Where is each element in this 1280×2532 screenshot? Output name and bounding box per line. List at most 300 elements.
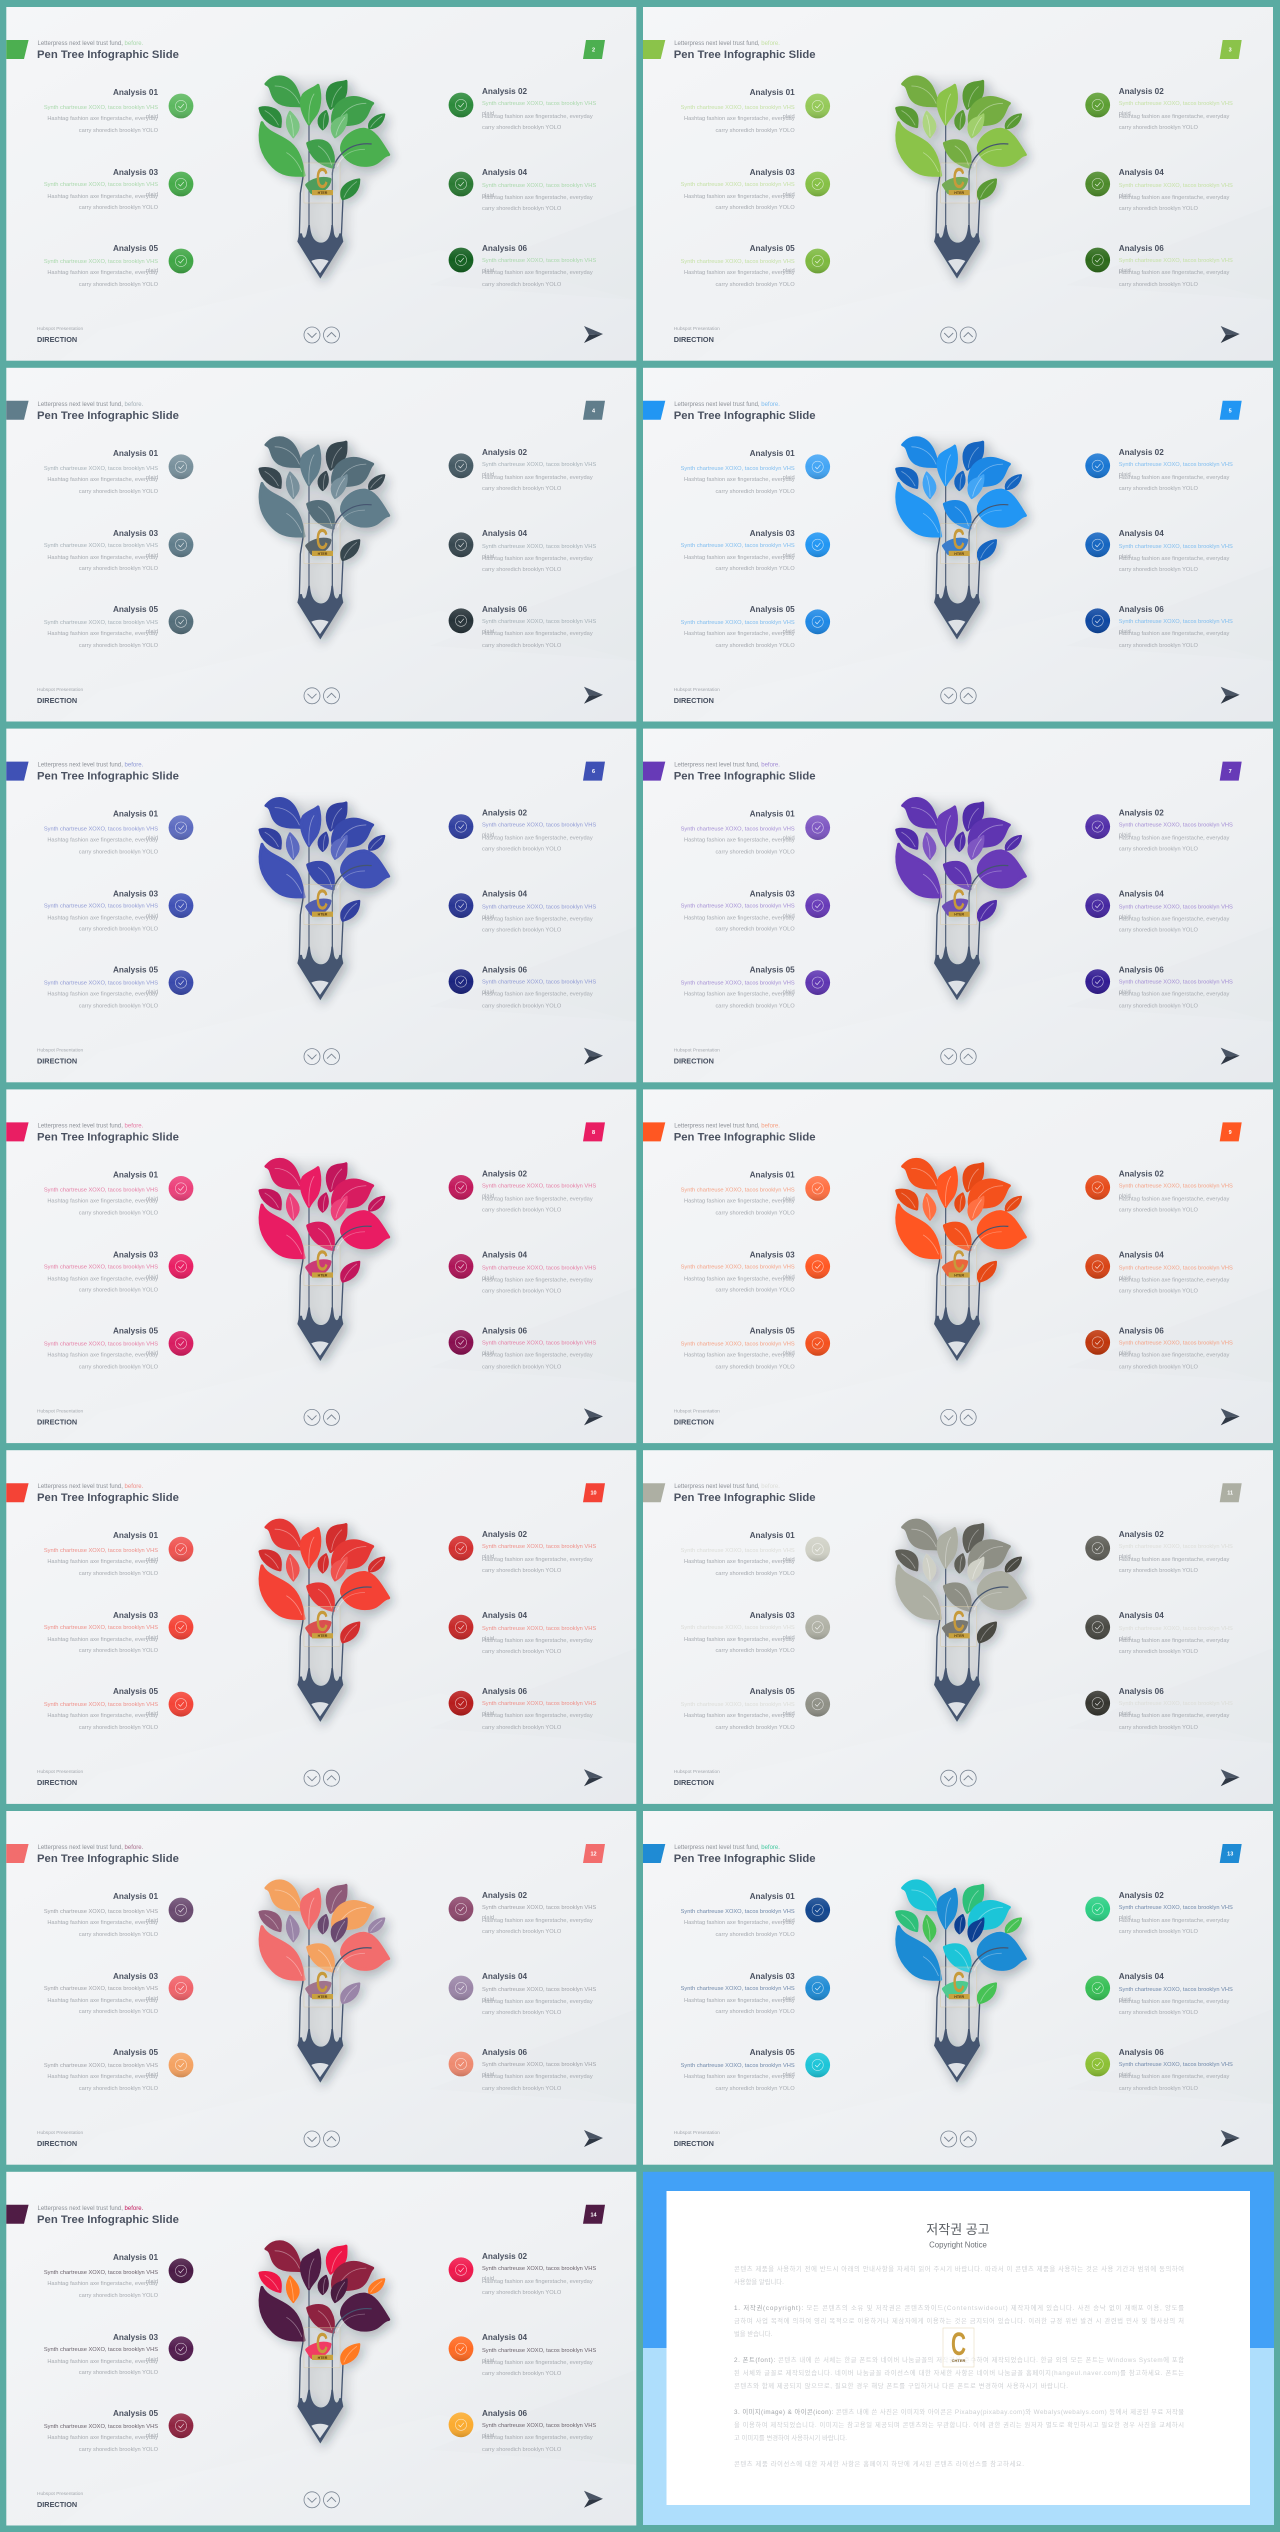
analysis 06: Analysis 06 <box>482 605 528 614</box>
analysis 04 <box>1085 1250 1233 1294</box>
analysis 04: Synth chartreuse XOXO, tacos brooklyn VHS <box>1119 1987 1233 1993</box>
header tab <box>6 762 29 781</box>
page number tag: 4 <box>592 408 596 414</box>
logo watermark: HTER <box>318 552 328 556</box>
analysis 05: Synth chartreuse XOXO, tacos brooklyn VHS <box>681 1341 795 1347</box>
analysis 01 <box>44 1170 193 1216</box>
analysis 06: carry shoredich brooklyn YOLO <box>1119 282 1199 288</box>
analysis 05: Synth chartreuse XOXO, tacos brooklyn VHS <box>681 259 795 265</box>
analysis 05: plaid <box>783 1711 795 1717</box>
analysis 05: Synth chartreuse XOXO, tacos brooklyn VHS <box>44 981 158 987</box>
icon: navigation chevrons <box>304 1770 340 1786</box>
icon: navigation chevrons <box>941 327 976 343</box>
analysis 04: carry shoredich brooklyn YOLO <box>1119 1288 1199 1294</box>
page number tag <box>1220 1844 1242 1863</box>
analysis 02: Analysis 02 <box>482 2252 528 2261</box>
analysis 05: Analysis 05 <box>750 244 795 253</box>
analysis 06: carry shoredich brooklyn YOLO <box>482 2086 562 2092</box>
analysis 02: Analysis 02 <box>1119 809 1164 818</box>
pen tree illustration <box>897 438 1027 647</box>
footer text: DIRECTION <box>37 2500 77 2509</box>
page number tag <box>583 1483 605 1502</box>
analysis 04: plaid <box>1119 554 1131 560</box>
footer text: Hubspot Presentation <box>37 2491 83 2497</box>
analysis 04: plaid <box>482 1997 494 2003</box>
analysis 04: Synth chartreuse XOXO, tacos brooklyn VHS <box>482 2348 596 2354</box>
analysis 03: Analysis 03 <box>750 1611 795 1620</box>
analysis 04: plaid <box>1119 1275 1131 1281</box>
analysis 03: Analysis 03 <box>750 890 795 899</box>
subtitle: Letterpress next level trust fund, before. <box>674 402 780 408</box>
analysis 04: Synth chartreuse XOXO, tacos brooklyn VHS <box>482 183 596 189</box>
logo watermark <box>941 1245 977 1285</box>
pen tree illustration <box>260 1520 390 1730</box>
footer text <box>37 687 83 705</box>
analysis 04: carry shoredich brooklyn YOLO <box>482 206 562 212</box>
analysis 06: Synth chartreuse XOXO, tacos brooklyn VHS <box>482 1701 596 1707</box>
analysis 05 <box>681 1326 830 1370</box>
analysis 05: Hashtag fashion axe fingerstache, everyday <box>47 2074 158 2080</box>
analysis 03 <box>44 1972 193 2015</box>
analysis 03: Analysis 03 <box>113 2333 158 2342</box>
analysis 02: Hashtag fashion axe fingerstache, everyday <box>1119 1557 1230 1563</box>
notice intro <box>734 2264 1184 2286</box>
analysis 06: Synth chartreuse XOXO, tacos brooklyn VHS <box>1119 1701 1233 1707</box>
pen tree illustration <box>260 1881 390 2091</box>
analysis 03: Hashtag fashion axe fingerstache, everyday <box>684 1276 795 1282</box>
logo watermark: C <box>951 2326 966 2362</box>
analysis 04 <box>449 168 596 212</box>
header tab <box>6 1122 29 1141</box>
analysis 05: carry shoredich brooklyn YOLO <box>79 2086 159 2092</box>
analysis 05: Analysis 05 <box>113 966 158 975</box>
analysis 02: Analysis 02 <box>1119 1891 1164 1900</box>
analysis 06: Hashtag fashion axe fingerstache, everyday <box>1119 992 1230 998</box>
analysis 06: Analysis 06 <box>482 966 528 975</box>
analysis 03: Analysis 03 <box>750 1972 795 1981</box>
page number tag <box>1220 762 1242 781</box>
analysis 03: plaid <box>783 1996 795 2002</box>
analysis 03: Hashtag fashion axe fingerstache, everyday <box>684 555 795 561</box>
page number tag <box>1220 401 1242 420</box>
analysis 04: Analysis 04 <box>482 1611 528 1620</box>
pen tree illustration <box>897 799 1027 1008</box>
analysis 01: carry shoredich brooklyn YOLO <box>715 1210 795 1216</box>
analysis 05: Hashtag fashion axe fingerstache, everyday <box>47 1713 158 1719</box>
notice intro: 사용함을 알립니다. <box>734 2277 784 2286</box>
slide 6: indigo pen tree <box>6 729 636 1082</box>
analysis 02: Analysis 02 <box>482 1530 528 1539</box>
title: Pen Tree Infographic Slide <box>37 1131 179 1143</box>
analysis 03: Hashtag fashion axe fingerstache, everyday <box>47 1998 158 2004</box>
analysis 04: Analysis 04 <box>1119 529 1164 538</box>
analysis 05: Analysis 05 <box>113 2048 158 2057</box>
notice section 1: copyright: 벌을 받습니다. <box>734 2329 773 2338</box>
slide 9: orange pen tree <box>643 1089 1273 1443</box>
analysis 06: Hashtag fashion axe fingerstache, everyday <box>482 2435 593 2441</box>
page number tag: 11 <box>1227 1491 1233 1497</box>
analysis 03: plaid <box>783 192 795 198</box>
notice section 3: images and icons: 고 이미지를 변경하여 사용하시기 바랍니다. <box>734 2433 847 2442</box>
analysis 04: carry shoredich brooklyn YOLO <box>1119 1649 1199 1655</box>
analysis 04: Analysis 04 <box>482 1972 528 1981</box>
footer text <box>674 1408 720 1426</box>
footer text <box>674 1048 720 1066</box>
analysis 01: Synth chartreuse XOXO, tacos brooklyn VHS <box>681 827 795 833</box>
pen tree illustration <box>897 1159 1027 1369</box>
icon: navigation chevrons <box>941 1409 976 1425</box>
analysis 02 <box>1085 1169 1233 1213</box>
analysis 05: plaid <box>146 2433 158 2439</box>
footer text: DIRECTION <box>37 335 77 344</box>
analysis 02: carry shoredich brooklyn YOLO <box>1119 1568 1199 1574</box>
header tab <box>643 40 665 59</box>
logo watermark <box>943 2326 974 2367</box>
analysis 02: Analysis 02 <box>482 1891 528 1900</box>
subtitle: Letterpress next level trust fund, before. <box>674 41 780 47</box>
analysis 04: carry shoredich brooklyn YOLO <box>482 928 562 934</box>
analysis 03: Synth chartreuse XOXO, tacos brooklyn VHS <box>681 904 795 910</box>
notice section 1: copyright: 금하며 사업 목적에 의하여 영리 목적으로 이용하거나 제삼자에게 이용하는 것은 금지되어 있습니다. 이러한 규정 위반 발견 시 관련법 민사 및 형사상의 처 <box>734 2316 1184 2325</box>
analysis 03: Hashtag fashion axe fingerstache, everyday <box>684 1637 795 1643</box>
analysis 05: Hashtag fashion axe fingerstache, everyday <box>47 992 158 998</box>
analysis 04 <box>1085 1972 1233 2016</box>
analysis 01: carry shoredich brooklyn YOLO <box>79 1210 159 1216</box>
analysis 01: plaid <box>146 1196 158 1202</box>
analysis 01: Synth chartreuse XOXO, tacos brooklyn VHS <box>681 1548 795 1554</box>
footer text: DIRECTION <box>37 1417 77 1426</box>
analysis 06: plaid <box>482 1711 494 1717</box>
analysis 03: carry shoredich brooklyn YOLO <box>79 205 159 211</box>
logo watermark: HTER <box>954 913 964 917</box>
analysis 02: Synth chartreuse XOXO, tacos brooklyn VHS <box>482 1905 596 1911</box>
analysis 04: Synth chartreuse XOXO, tacos brooklyn VHS <box>482 1265 596 1271</box>
analysis 03: Hashtag fashion axe fingerstache, everyday <box>47 916 158 922</box>
analysis 06: plaid <box>1119 629 1131 635</box>
analysis 05: plaid <box>146 1350 158 1356</box>
analysis 03: carry shoredich brooklyn YOLO <box>715 1287 795 1293</box>
analysis 01: Analysis 01 <box>113 1531 158 1540</box>
analysis 05: Synth chartreuse XOXO, tacos brooklyn VHS <box>44 2424 158 2430</box>
notice section 2: fonts: 콘텐츠와 함께 제공되지 않으므로, 필요한 경우 해당 폰트를 구입하거나 다른 폰트로 변경하여 사용하시기 바랍니다. <box>734 2381 1068 2390</box>
analysis 03 <box>44 1611 193 1654</box>
analysis 02 <box>449 809 596 853</box>
analysis 05: Hashtag fashion axe fingerstache, everyday <box>684 992 795 998</box>
header tab <box>6 1483 29 1502</box>
logo watermark <box>941 163 977 203</box>
analysis 03: Synth chartreuse XOXO, tacos brooklyn VHS <box>44 1625 158 1631</box>
analysis 03: plaid <box>783 553 795 559</box>
logo watermark <box>304 2328 340 2368</box>
analysis 03: Analysis 03 <box>750 529 795 538</box>
analysis 01: plaid <box>783 1918 795 1924</box>
pen tree illustration <box>260 77 390 287</box>
analysis 02: Hashtag fashion axe fingerstache, everyday <box>482 1918 593 1924</box>
analysis 06: Analysis 06 <box>482 244 528 253</box>
analysis 02: Synth chartreuse XOXO, tacos brooklyn VHS <box>482 462 596 468</box>
analysis 04: Hashtag fashion axe fingerstache, everyday <box>1119 1999 1230 2005</box>
analysis 01: Synth chartreuse XOXO, tacos brooklyn VHS <box>44 1187 158 1193</box>
subtitle: Letterpress next level trust fund, before. <box>38 2206 144 2212</box>
analysis 01: Analysis 01 <box>113 88 158 97</box>
subtitle: Letterpress next level trust fund, before. <box>38 402 144 408</box>
icon: navigation chevrons <box>304 327 340 343</box>
analysis 02 <box>449 1169 596 1213</box>
analysis 05: Hashtag fashion axe fingerstache, everyday <box>47 631 158 637</box>
analysis 02: carry shoredich brooklyn YOLO <box>482 2290 562 2296</box>
analysis 05: carry shoredich brooklyn YOLO <box>715 643 795 649</box>
page number tag: 9 <box>1229 1130 1232 1136</box>
analysis 04: carry shoredich brooklyn YOLO <box>482 567 562 573</box>
analysis 06: Synth chartreuse XOXO, tacos brooklyn VHS <box>482 980 596 986</box>
analysis 01: Hashtag fashion axe fingerstache, everyday <box>47 1198 158 1204</box>
analysis 06 <box>449 244 596 288</box>
analysis 02: plaid <box>1119 1193 1131 1199</box>
page number tag <box>1220 1483 1242 1502</box>
analysis 04: Synth chartreuse XOXO, tacos brooklyn VHS <box>482 1626 596 1632</box>
icon: paper plane <box>1221 687 1240 704</box>
analysis 02: plaid <box>482 1554 494 1560</box>
title: Pen Tree Infographic Slide <box>37 2214 179 2226</box>
analysis 06: Hashtag fashion axe fingerstache, everyday <box>482 992 593 998</box>
page number tag <box>583 2205 605 2224</box>
analysis 03 <box>44 1250 193 1293</box>
analysis 01: carry shoredich brooklyn YOLO <box>715 850 795 856</box>
analysis 01: carry shoredich brooklyn YOLO <box>79 489 159 495</box>
slide 11: grey pen tree <box>643 1450 1273 1804</box>
title: Pen Tree Infographic Slide <box>674 1131 816 1143</box>
pen tree illustration <box>897 1881 1027 2091</box>
analysis 06: carry shoredich brooklyn YOLO <box>1119 2086 1199 2092</box>
page number tag: 2 <box>592 48 595 54</box>
analysis 03: Synth chartreuse XOXO, tacos brooklyn VHS <box>681 1625 795 1631</box>
footer text: DIRECTION <box>37 1057 77 1066</box>
analysis 04: carry shoredich brooklyn YOLO <box>1119 206 1199 212</box>
analysis 01 <box>681 88 830 134</box>
analysis 05: Analysis 05 <box>750 605 795 614</box>
page number tag <box>1220 1122 1242 1141</box>
analysis 05: Analysis 05 <box>113 605 158 614</box>
analysis 05: Analysis 05 <box>750 2048 795 2057</box>
title: Pen Tree Infographic Slide <box>674 1492 816 1504</box>
analysis 04: Analysis 04 <box>1119 1972 1164 1981</box>
analysis 01: Synth chartreuse XOXO, tacos brooklyn VHS <box>44 1548 158 1554</box>
analysis 03: Analysis 03 <box>750 1250 795 1259</box>
analysis 03: plaid <box>146 1635 158 1641</box>
analysis 06: carry shoredich brooklyn YOLO <box>1119 1725 1199 1731</box>
analysis 06: plaid <box>1119 990 1131 996</box>
analysis 01 <box>44 449 193 495</box>
analysis 03: plaid <box>783 1274 795 1280</box>
analysis 04 <box>449 2333 596 2377</box>
analysis 02: plaid <box>1119 1554 1131 1560</box>
analysis 02: Hashtag fashion axe fingerstache, everyday <box>482 1557 593 1563</box>
analysis 05: plaid <box>146 1711 158 1717</box>
analysis 01: Analysis 01 <box>750 1531 795 1540</box>
subtitle: Letterpress next level trust fund, before. <box>674 763 780 769</box>
analysis 02: plaid <box>482 111 494 117</box>
logo watermark: HTER <box>954 552 964 556</box>
analysis 04 <box>449 1250 596 1294</box>
analysis 06: Analysis 06 <box>1119 966 1164 975</box>
analysis 03 <box>681 529 830 572</box>
analysis 01: Analysis 01 <box>113 1892 158 1901</box>
footer text <box>674 2130 720 2148</box>
analysis 01: Analysis 01 <box>113 1170 158 1179</box>
pen tree illustration <box>260 799 390 1008</box>
analysis 03: carry shoredich brooklyn YOLO <box>715 205 795 211</box>
subtitle: Letterpress next level trust fund, before. <box>38 41 144 47</box>
logo watermark <box>304 1967 340 2007</box>
analysis 05 <box>681 2048 830 2092</box>
analysis 01: Synth chartreuse XOXO, tacos brooklyn VHS <box>681 105 795 111</box>
analysis 05: Analysis 05 <box>750 1326 795 1335</box>
analysis 04: Hashtag fashion axe fingerstache, everyday <box>482 1999 593 2005</box>
analysis 02: carry shoredich brooklyn YOLO <box>1119 1207 1199 1213</box>
analysis 02: Hashtag fashion axe fingerstache, everyday <box>1119 1196 1230 1202</box>
analysis 05: plaid <box>146 629 158 635</box>
analysis 02: Synth chartreuse XOXO, tacos brooklyn VHS <box>1119 823 1233 829</box>
analysis 03: Analysis 03 <box>113 529 158 538</box>
analysis 01: plaid <box>783 836 795 842</box>
title: Pen Tree Infographic Slide <box>37 1853 179 1865</box>
title: Pen Tree Infographic Slide <box>37 410 179 422</box>
analysis 05: carry shoredich brooklyn YOLO <box>79 2447 159 2453</box>
analysis 06: carry shoredich brooklyn YOLO <box>482 643 562 649</box>
analysis 02: Hashtag fashion axe fingerstache, everyday <box>482 114 593 120</box>
analysis 03: carry shoredich brooklyn YOLO <box>715 927 795 933</box>
analysis 02: carry shoredich brooklyn YOLO <box>1119 847 1199 853</box>
analysis 03 <box>44 529 193 572</box>
analysis 02: carry shoredich brooklyn YOLO <box>482 125 562 131</box>
analysis 06 <box>449 2048 596 2092</box>
analysis 01: Hashtag fashion axe fingerstache, everyday <box>684 1920 795 1926</box>
analysis 06: Hashtag fashion axe fingerstache, everyday <box>482 270 593 276</box>
analysis 06: Analysis 06 <box>1119 244 1164 253</box>
analysis 04: plaid <box>1119 193 1131 199</box>
analysis 03: Synth chartreuse XOXO, tacos brooklyn VHS <box>681 543 795 549</box>
footer text <box>37 326 83 344</box>
page number tag: 7 <box>1229 769 1232 775</box>
analysis 05: Synth chartreuse XOXO, tacos brooklyn VHS <box>44 259 158 265</box>
footer text: Hubspot Presentation <box>37 1048 83 1054</box>
icon: navigation chevrons <box>941 1770 976 1786</box>
analysis 06: Synth chartreuse XOXO, tacos brooklyn VHS <box>482 258 596 264</box>
slide 13: blue and teal pen tree <box>643 1811 1273 2165</box>
analysis 01: Analysis 01 <box>113 449 158 458</box>
icon: navigation chevrons <box>304 2492 340 2508</box>
slide 10: red pen tree <box>6 1450 636 1804</box>
pen tree illustration <box>897 1520 1027 1730</box>
page number tag: 6 <box>592 769 595 775</box>
analysis 03: plaid <box>783 914 795 920</box>
header tab <box>6 401 29 420</box>
analysis 04: Hashtag fashion axe fingerstache, everyday <box>1119 195 1230 201</box>
notice section 3: images and icons <box>734 2407 1184 2442</box>
analysis 04: Hashtag fashion axe fingerstache, everyday <box>1119 1638 1230 1644</box>
analysis 01: Analysis 01 <box>113 2253 158 2262</box>
analysis 05 <box>44 1687 193 1731</box>
page number tag: 8 <box>592 1130 595 1136</box>
analysis 01: plaid <box>146 475 158 481</box>
slide 8: pink pen tree <box>6 1089 636 1443</box>
analysis 04: Analysis 04 <box>482 529 528 538</box>
analysis 01: Hashtag fashion axe fingerstache, everyday <box>47 1559 158 1565</box>
analysis 03 <box>681 1972 830 2015</box>
analysis 01 <box>681 449 830 495</box>
analysis 06: Hashtag fashion axe fingerstache, everyday <box>1119 631 1230 637</box>
header tab <box>6 40 29 59</box>
logo watermark <box>941 885 977 925</box>
title: Pen Tree Infographic Slide <box>674 771 816 783</box>
analysis 04: Synth chartreuse XOXO, tacos brooklyn VHS <box>1119 1626 1233 1632</box>
header tab <box>643 401 665 420</box>
analysis 03: plaid <box>146 1274 158 1280</box>
logo watermark: HTER <box>318 191 328 195</box>
notice section 2: fonts: 2. 폰트(font): 콘텐츠 내에 쓴 서체는 한글 폰트와 네이버 나눔글꼴의 저작권을 준수하여 제작되었습니다. 한글 외의 모든 폰트는 Windows System에 포함 <box>734 2355 1184 2364</box>
analysis 01 <box>681 1531 830 1577</box>
analysis 05 <box>44 605 193 649</box>
analysis 02: Analysis 02 <box>1119 1169 1164 1178</box>
notice card <box>666 2191 1250 2505</box>
footer text: Hubspot Presentation <box>37 1408 83 1414</box>
analysis 06 <box>1085 1326 1233 1370</box>
title: Pen Tree Infographic Slide <box>37 771 179 783</box>
analysis 03: carry shoredich brooklyn YOLO <box>715 1648 795 1654</box>
logo watermark: HTER <box>318 1995 328 1999</box>
analysis 03: Analysis 03 <box>113 168 158 177</box>
analysis 05: carry shoredich brooklyn YOLO <box>79 1725 159 1731</box>
analysis 04: carry shoredich brooklyn YOLO <box>482 2010 562 2016</box>
analysis 04: Hashtag fashion axe fingerstache, everyday <box>1119 556 1230 562</box>
analysis 03: carry shoredich brooklyn YOLO <box>79 927 159 933</box>
icon: paper plane <box>584 2130 603 2147</box>
logo watermark <box>304 885 340 925</box>
analysis 01: Analysis 01 <box>750 88 795 97</box>
slide 4: slate pen tree <box>6 368 636 722</box>
page number tag <box>583 40 605 59</box>
analysis 02: Analysis 02 <box>482 448 528 457</box>
footer text: Hubspot Presentation <box>37 1769 83 1775</box>
analysis 01: carry shoredich brooklyn YOLO <box>715 1571 795 1577</box>
analysis 03: Hashtag fashion axe fingerstache, everyday <box>684 194 795 200</box>
footer text: DIRECTION <box>674 1778 714 1787</box>
footer text: DIRECTION <box>674 1417 714 1426</box>
analysis 05 <box>44 244 193 288</box>
analysis 02 <box>449 2252 596 2296</box>
analysis 01: Hashtag fashion axe fingerstache, everyday <box>684 477 795 483</box>
analysis 05: Analysis 05 <box>113 1687 158 1696</box>
analysis 02: plaid <box>482 833 494 839</box>
analysis 05: Synth chartreuse XOXO, tacos brooklyn VHS <box>44 2063 158 2069</box>
footer text <box>37 1408 83 1426</box>
analysis 04 <box>449 1611 596 1655</box>
analysis 04 <box>1085 1611 1233 1655</box>
page number tag <box>583 1844 605 1863</box>
slide 7: purple pen tree <box>643 729 1273 1082</box>
analysis 06: plaid <box>482 268 494 274</box>
analysis 03: carry shoredich brooklyn YOLO <box>79 2009 159 2015</box>
pen tree illustration <box>897 77 1027 287</box>
analysis 02: Synth chartreuse XOXO, tacos brooklyn VHS <box>1119 1544 1233 1550</box>
analysis 05: Hashtag fashion axe fingerstache, everyday <box>684 2074 795 2080</box>
analysis 04: carry shoredich brooklyn YOLO <box>482 1288 562 1294</box>
analysis 06: Hashtag fashion axe fingerstache, everyday <box>1119 270 1230 276</box>
analysis 04 <box>1085 529 1233 573</box>
title: Pen Tree Infographic Slide <box>37 1492 179 1504</box>
analysis 01: plaid <box>783 1196 795 1202</box>
analysis 05: plaid <box>146 990 158 996</box>
